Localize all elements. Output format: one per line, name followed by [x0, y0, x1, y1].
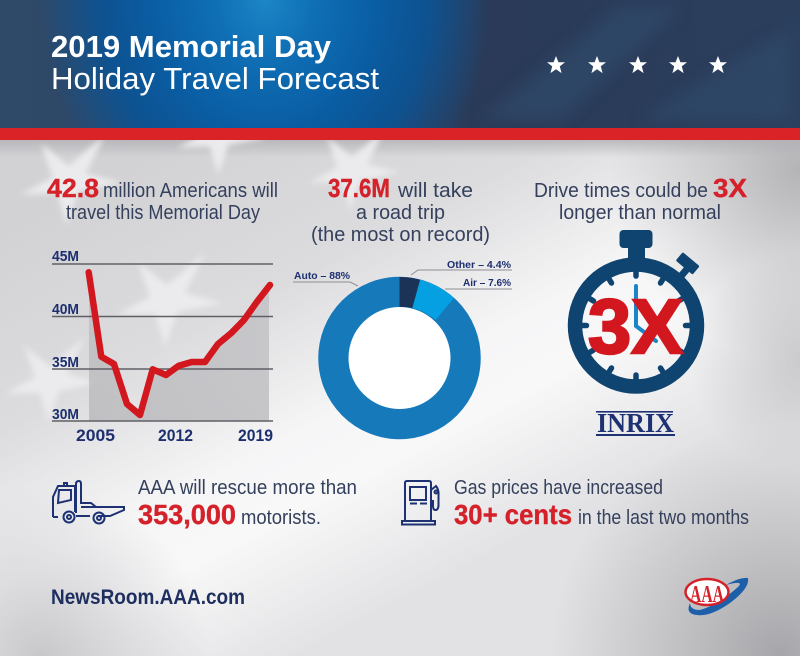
title: Holiday Travel Forecast: [51, 61, 379, 96]
text: gas prices: in the last two months: [578, 506, 749, 529]
footer link: NewsRoom.AAA.com: [51, 586, 245, 609]
text: AAA rescue: motorists.: [241, 506, 321, 529]
heading: 37.6M road trip: (the most on record): [311, 223, 490, 246]
icon: stopwatch with 3X: [575, 230, 700, 386]
text: gas prices: [454, 476, 749, 530]
heading: drive times: 3X: [713, 173, 748, 203]
heading: drive times: Drive times could be: [534, 179, 708, 202]
heading: 37.6M road trip: 37.6M: [328, 173, 390, 203]
icon: stopwatch with 3X: 3X: [588, 284, 683, 370]
donut chart: mode of travel: [293, 259, 512, 424]
header banner: [0, 0, 800, 128]
heading: 37.6M road trip: [311, 173, 490, 246]
line chart: travelers 2005-2019: 45M: [52, 248, 79, 265]
red band: [0, 128, 800, 140]
heading: 42.8 million: 42.8: [47, 173, 99, 203]
heading: 37.6M road trip: a road trip: [356, 201, 445, 224]
title: 2019 Memorial Day: [51, 29, 332, 64]
line chart: travelers 2005-2019: 2012: [158, 427, 193, 445]
heading: 37.6M road trip: will take: [397, 179, 473, 202]
line chart: travelers 2005-2019: 30M: [52, 406, 79, 423]
logo: AAA: AAA: [690, 582, 724, 608]
five stars: [547, 56, 727, 73]
line chart: travelers 2005-2019: 40M: [52, 301, 79, 318]
logo: AAA: [686, 578, 748, 615]
heading: 42.8 million: million Americans will: [103, 179, 278, 202]
text: gas prices: Gas prices have increased: [454, 476, 663, 499]
line chart: travelers 2005-2019: 2005: [76, 427, 115, 445]
title: [52, 35, 379, 96]
text: AAA rescue: 353,000: [138, 499, 236, 530]
donut chart: mode of travel: Other – 4.4%: [447, 259, 512, 271]
icon: gas pump: [402, 481, 439, 524]
line chart: travelers 2005-2019: [52, 248, 273, 445]
line chart: travelers 2005-2019: 35M: [52, 354, 79, 371]
icon: tow truck: [53, 481, 124, 524]
donut chart: mode of travel: Auto – 88%: [294, 270, 351, 282]
heading: 42.8 million: [47, 173, 278, 224]
text: AAA rescue: [138, 476, 357, 530]
donut chart: mode of travel: Air – 7.6%: [463, 277, 512, 289]
logo: INRIX: INRIX: [597, 408, 674, 438]
heading: 42.8 million: travel this Memorial Day: [66, 201, 261, 224]
text: AAA rescue: AAA will rescue more than: [138, 476, 357, 499]
line chart: travelers 2005-2019: 2019: [238, 427, 273, 445]
text: gas prices: 30+ cents: [454, 499, 572, 530]
heading: drive times: longer than normal: [559, 201, 721, 224]
heading: drive times: [534, 173, 748, 224]
